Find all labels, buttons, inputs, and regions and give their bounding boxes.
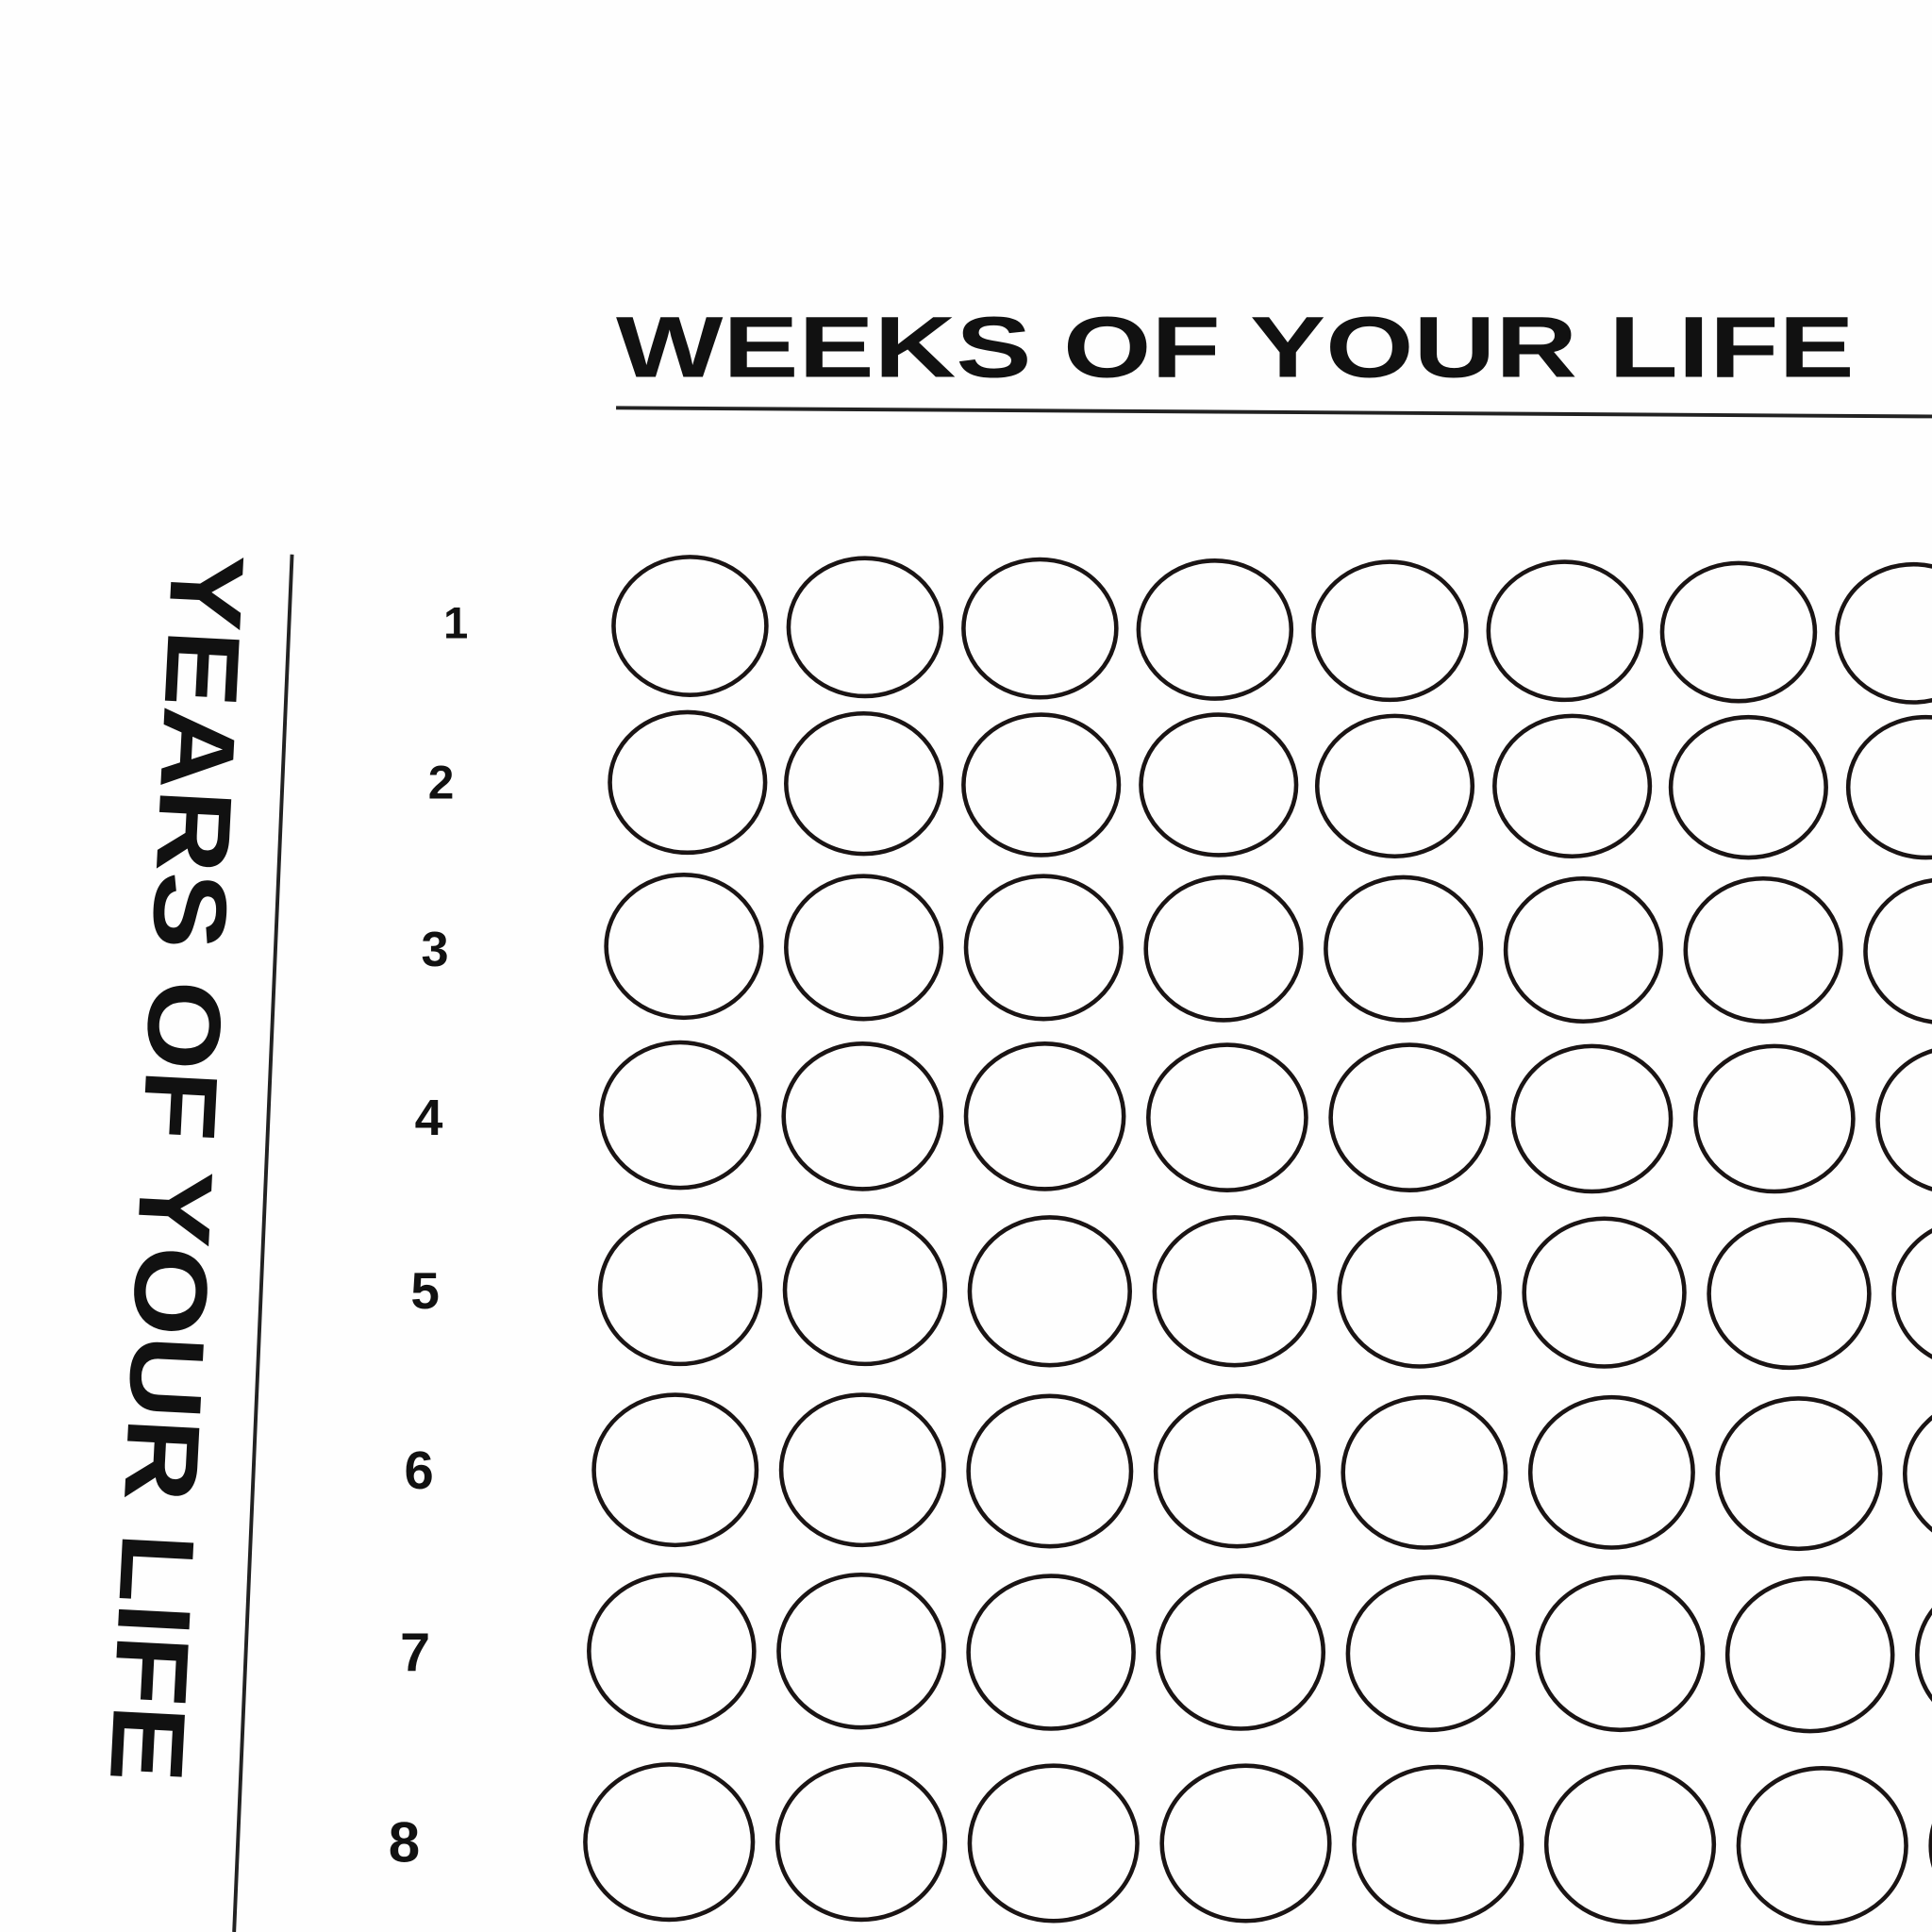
row numbers: 4 [415, 1091, 443, 1146]
row numbers: 2 [428, 756, 454, 808]
row numbers: 1 [443, 598, 468, 648]
title: WEEKS OF YOUR LIFE [616, 300, 1855, 396]
row numbers: 3 [422, 923, 449, 977]
row numbers: 6 [404, 1441, 434, 1500]
row numbers: 7 [400, 1623, 430, 1683]
row numbers: 8 [389, 1811, 420, 1874]
vertical axis title: YEARS OF YOUR LIFE [88, 551, 265, 1785]
row numbers [389, 598, 468, 1874]
row numbers: 5 [410, 1261, 440, 1320]
circle grid [585, 557, 1932, 1924]
